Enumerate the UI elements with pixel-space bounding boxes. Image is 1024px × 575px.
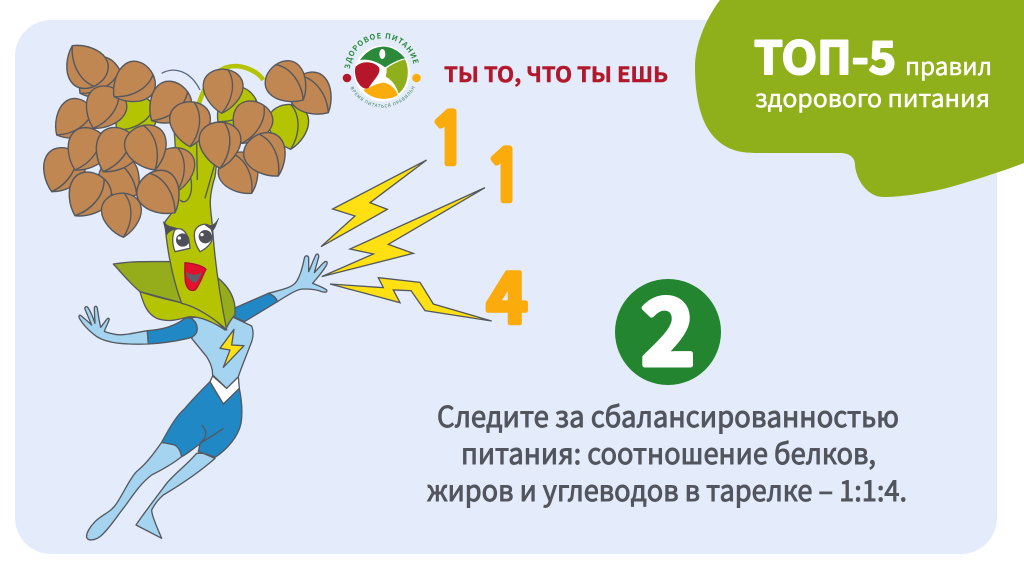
ratio numbers <box>428 106 528 344</box>
slogan: ТЫ ТО, ЧТО ТЫ ЕШЬ <box>444 59 668 89</box>
lightning bolts <box>321 160 492 321</box>
badge digit: 2 <box>641 259 695 392</box>
main text <box>427 395 907 510</box>
character: buckwheat superhero <box>33 34 344 540</box>
icon: apple <box>343 74 351 82</box>
cape left leaf <box>113 262 183 303</box>
line 2: питания: соотношение белков, <box>461 432 876 473</box>
bolt 2 <box>322 188 485 277</box>
front leg <box>87 442 182 540</box>
header title <box>754 22 992 114</box>
logo <box>342 32 421 108</box>
left forearm and hand <box>79 306 148 344</box>
line 1: Следите за сбалансированностью <box>437 395 899 436</box>
bolt 3 <box>330 278 492 321</box>
belt <box>210 376 239 404</box>
cape right leaf <box>212 273 235 330</box>
icon: orange <box>412 74 421 82</box>
bolt 1 <box>321 160 427 247</box>
stem <box>165 123 227 330</box>
number badge <box>615 259 721 392</box>
left sleeve <box>147 318 197 344</box>
antenna <box>162 70 200 90</box>
mouth <box>185 263 206 290</box>
title: rules: правил <box>905 47 992 82</box>
cape front <box>140 292 225 330</box>
stem ribs <box>180 143 215 202</box>
title: healthy eating: здорового питания <box>755 79 990 114</box>
rear leg <box>136 453 215 538</box>
line 3: жиров и углеводов в тарелке – 1:1:4. <box>427 469 907 510</box>
eyelashes <box>163 218 219 235</box>
logo emblem <box>354 45 410 101</box>
right eye <box>194 224 213 252</box>
body <box>79 254 327 540</box>
logo text top: ЗДОРОВОЕ ПИТАНИЕ <box>344 32 419 69</box>
stem branches <box>198 66 263 105</box>
shorts crease <box>200 425 223 443</box>
number: carbs 4: 4 <box>486 243 528 344</box>
right forearm and hand <box>268 254 327 302</box>
seed cluster <box>33 34 344 239</box>
shorts <box>162 382 242 457</box>
chest bolt <box>220 329 244 367</box>
green leaves <box>105 80 311 151</box>
buckwheat seeds <box>33 34 344 239</box>
right sleeve <box>233 293 277 322</box>
number: fats 1: 1 <box>484 143 526 212</box>
badge circle <box>615 279 721 385</box>
head and cape <box>113 66 263 330</box>
torso <box>192 317 253 388</box>
title: top five: ТОП-5 <box>754 22 896 87</box>
corner blob: header background <box>695 0 1024 197</box>
left eye <box>173 229 190 252</box>
number: proteins 1: 1 <box>428 106 470 175</box>
